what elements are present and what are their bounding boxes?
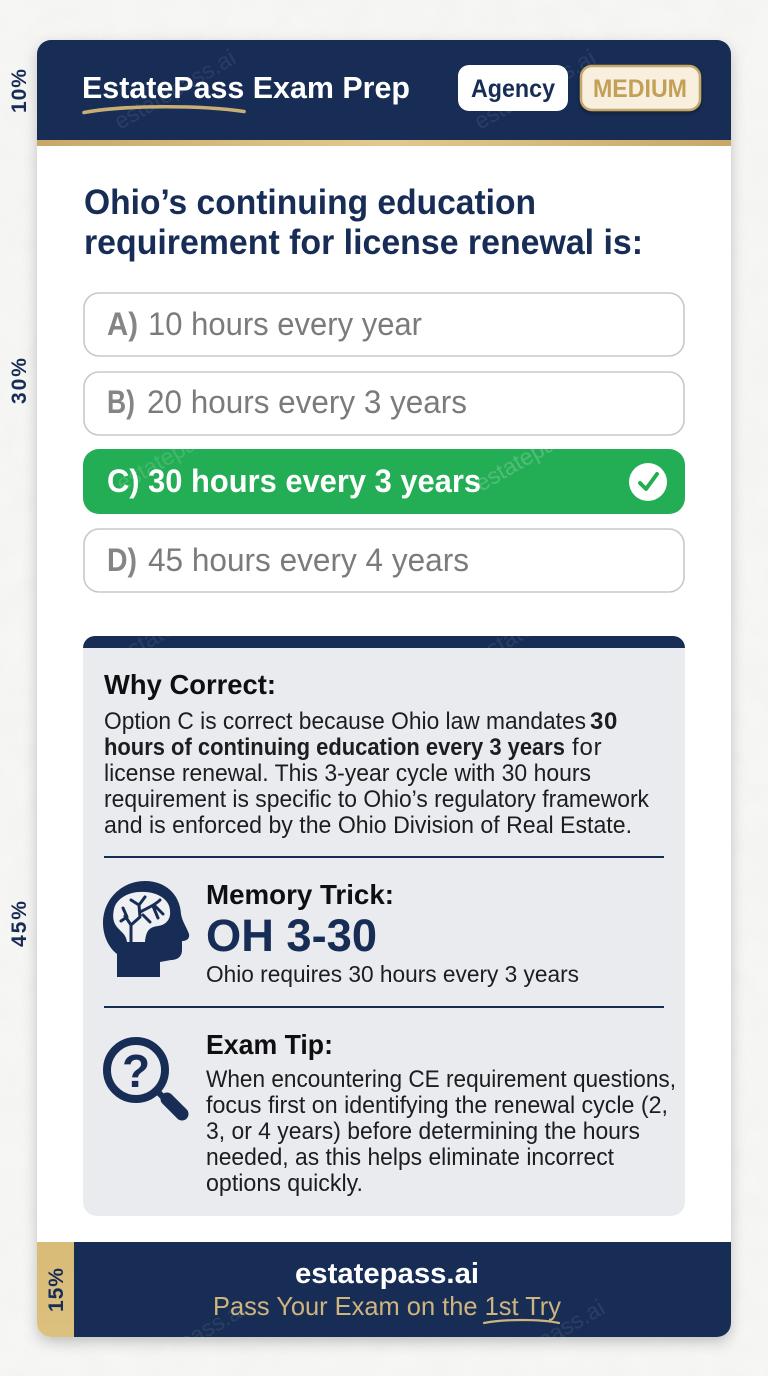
footer bbox=[37, 1242, 731, 1337]
option B: 20 hours every 3 years bbox=[147, 384, 467, 420]
exam tip: needed, as this helps eliminate incorrect bbox=[206, 1144, 614, 1171]
exam tip: 3, or 4 years) before determining the hours bbox=[206, 1118, 640, 1145]
option B bbox=[84, 372, 684, 435]
icon: magnifier question bbox=[107, 1041, 182, 1114]
memory trick: Memory Trick: bbox=[206, 879, 394, 910]
exam tip: When encountering CE requirement questions, bbox=[206, 1066, 676, 1093]
question heading bbox=[84, 183, 643, 262]
question heading: Ohio’s continuing education bbox=[84, 183, 536, 222]
icon: brain head bbox=[103, 881, 189, 977]
label: 15%: 15% bbox=[45, 1268, 68, 1312]
tagline: Pass Your Exam on the 1st Try bbox=[213, 1291, 561, 1321]
option D: D) bbox=[107, 542, 137, 578]
exam tip: focus first on identifying the renewal cycle (2, bbox=[206, 1092, 668, 1119]
option B: B) bbox=[107, 384, 135, 420]
header: estatepass.ai bbox=[110, 44, 240, 134]
why correct: Why Correct: bbox=[104, 669, 276, 700]
option D: 45 hours every 4 years bbox=[148, 542, 469, 578]
brand title: EstatePass Exam Prep bbox=[82, 70, 410, 105]
why correct: and is enforced by the Ohio Division of Real Estate. bbox=[104, 812, 632, 839]
why correct: for bbox=[572, 734, 602, 761]
explanation panel: estatepass.ai bbox=[470, 578, 601, 668]
site name: estatepass.ai bbox=[295, 1258, 479, 1290]
header bbox=[37, 40, 731, 146]
title underline bbox=[84, 107, 244, 112]
option C correct bbox=[83, 449, 685, 514]
label: 30%: 30% bbox=[8, 358, 31, 404]
exam tip: options quickly. bbox=[206, 1170, 363, 1197]
memory trick bbox=[206, 879, 579, 987]
tagline underline bbox=[484, 1320, 559, 1323]
option C correct: estatepass.ai bbox=[112, 406, 242, 496]
option A: A) bbox=[107, 306, 138, 342]
gold strip bbox=[37, 1242, 74, 1337]
memory trick: OH 3-30 bbox=[206, 910, 377, 961]
badge: Agency bbox=[458, 65, 568, 111]
label: 10%: 10% bbox=[8, 69, 31, 113]
option D bbox=[84, 529, 684, 592]
explanation panel: estatepass.ai bbox=[112, 578, 242, 668]
option A: 10 hours every year bbox=[148, 306, 422, 342]
exam tip: Exam Tip: bbox=[206, 1029, 333, 1060]
badge: MEDIUM bbox=[581, 66, 700, 110]
badge: MEDIUM: MEDIUM bbox=[593, 75, 687, 103]
why correct: Option C is correct because Ohio law mandates bbox=[104, 708, 586, 735]
badge: Agency: Agency bbox=[471, 75, 555, 103]
why correct: license renewal. This 3-year cycle with 30 hours bbox=[104, 760, 591, 787]
explanation panel bbox=[83, 578, 685, 1216]
icon: check mark bbox=[629, 463, 667, 501]
why correct: 30 bbox=[590, 708, 618, 735]
option A bbox=[84, 293, 684, 356]
header: estatepass.ai bbox=[470, 44, 600, 134]
option C correct: C) 30 hours every 3 years bbox=[107, 463, 481, 499]
why correct: hours of continuing education every 3 years bbox=[104, 734, 565, 761]
label: 45%: 45% bbox=[8, 901, 31, 947]
question heading: requirement for license renewal is: bbox=[84, 223, 643, 262]
icon: magnifier question: ? bbox=[122, 1045, 150, 1097]
option C correct: estatepass.ai bbox=[470, 406, 601, 496]
why correct bbox=[104, 669, 650, 839]
memory trick: Ohio requires 30 hours every 3 years bbox=[206, 961, 579, 987]
exam tip bbox=[206, 1029, 676, 1197]
why correct: requirement is specific to Ohio’s regulatory framework bbox=[104, 786, 650, 813]
